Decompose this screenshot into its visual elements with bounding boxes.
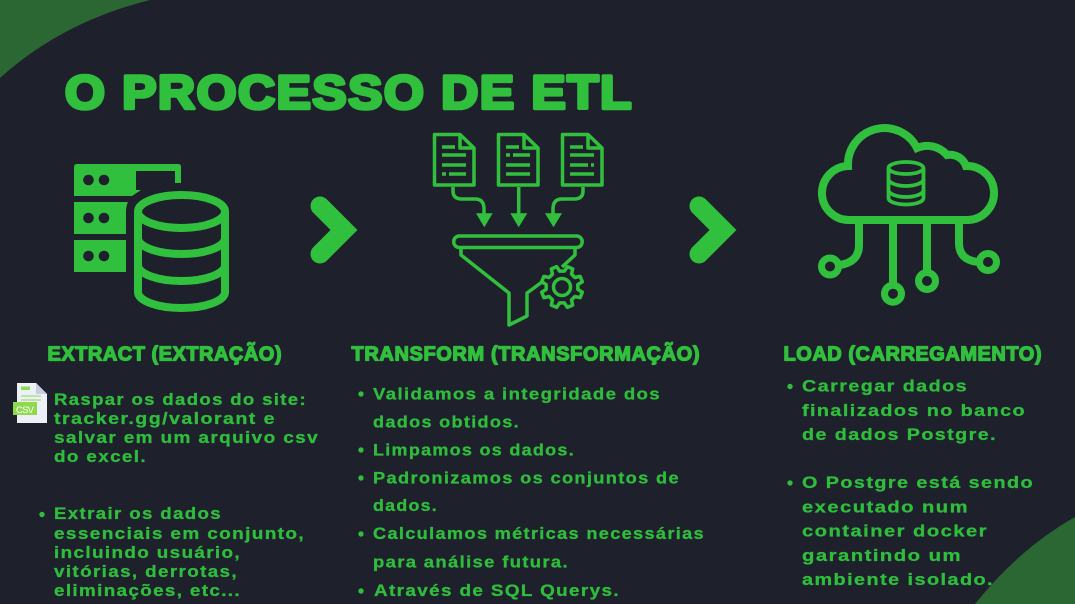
text block: transform steps: Padronizamos os conjuntos de (373, 469, 680, 487)
text block: load steps: container docker (802, 523, 988, 541)
text block: transform steps: dados obtidos. (373, 413, 520, 431)
text block: load steps: Carregar dados (802, 378, 968, 396)
text block: extract steps: do excel. (54, 448, 147, 466)
text block: load steps: garantindo um (802, 547, 962, 565)
text block: transform steps: Através de SQL Querys. (374, 582, 620, 600)
text block: extract steps: essenciais em conjunto, (54, 525, 305, 543)
arrow: extract to transform (320, 206, 344, 254)
text block: load steps: finalizados no banco (802, 402, 1026, 420)
icon: csv file (13, 383, 47, 423)
heading: transform: TRANSFORM (TRANSFORMAÇÃO) (352, 342, 700, 366)
heading: extract: EXTRACT (EXTRAÇÃO) (48, 342, 282, 366)
text block: extract steps: Raspar os dados do site: (54, 391, 307, 409)
text block: load steps: ambiente isolado. (802, 571, 994, 589)
text block: extract steps: eliminações, etc... (54, 582, 241, 600)
text block: transform steps: dados. (373, 497, 438, 515)
decorative corner: top left (0, 0, 150, 78)
text block: extract steps: vitórias, derrotas, (54, 563, 238, 581)
text block: extract steps (39, 391, 319, 600)
icon: cloud database (822, 128, 996, 302)
title: O PROCESSO DE ETL (65, 66, 633, 118)
text block: load steps: O Postgre está sendo (802, 474, 1034, 492)
text block: transform steps: Limpamos os dados. (373, 441, 575, 459)
text block: transform steps (358, 385, 705, 600)
text block: transform steps: Calculamos métricas necessárias (373, 525, 705, 543)
text block: extract steps: tracker.gg/valorant e (54, 410, 276, 428)
text block: extract steps: incluindo usuário, (54, 544, 241, 562)
text block: transform steps: Validamos a integridade dos (373, 385, 661, 403)
arrow: transform to load (699, 206, 723, 254)
heading: load: LOAD (CARREGAMENTO) (784, 344, 1042, 366)
text block: extract steps: salvar em um arquivo csv (54, 429, 319, 447)
decorative corner: bottom right (975, 517, 1075, 604)
text block: transform steps: para análise futura. (373, 553, 569, 571)
icon: csv file: CSV (16, 405, 35, 416)
text block: extract steps: Extrair os dados (54, 505, 222, 523)
text block: load steps: de dados Postgre. (802, 426, 997, 444)
text block: load steps: executado num (802, 499, 969, 517)
icon: documents into funnel with gear (434, 134, 602, 325)
icon: servers and database (74, 164, 225, 308)
text block: load steps (787, 378, 1034, 589)
